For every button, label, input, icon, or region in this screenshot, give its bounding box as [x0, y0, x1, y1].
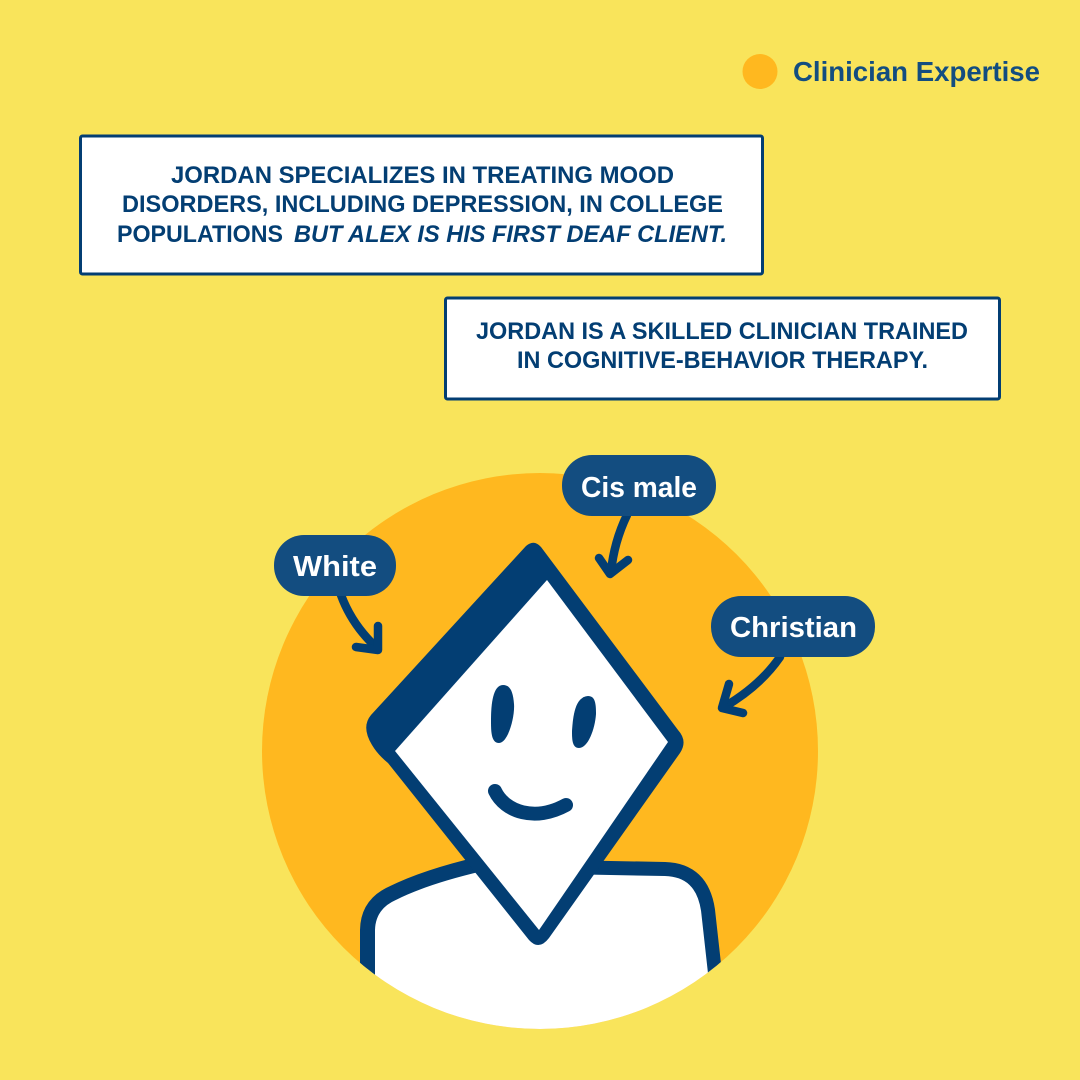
arrow: Cis male [599, 515, 628, 574]
legend: Clinician Expertise: Clinician Expertise [793, 56, 1040, 87]
text box: specialization [80, 136, 762, 274]
arrow: White [341, 595, 378, 650]
label: Cis male: Cis male [581, 472, 697, 504]
eyes [491, 685, 596, 748]
character body [368, 864, 718, 1040]
label: White: White [293, 551, 377, 583]
label: White [274, 535, 396, 596]
head: diamond with hair [366, 543, 684, 945]
character: Jordan [366, 543, 718, 1040]
text box: specialization: POPULATIONS [117, 221, 283, 248]
text box: training [446, 298, 1000, 399]
orange background circle [262, 473, 818, 1029]
label: Christian [711, 596, 875, 657]
label: Christian: Christian [730, 612, 857, 644]
text box: training: JORDAN IS A SKILLED CLINICIAN TRAINED [476, 318, 968, 345]
text box: specialization: BUT ALEX IS HIS FIRST DEAF CLIENT. [294, 221, 727, 248]
text box: training: IN COGNITIVE-BEHAVIOR THERAPY. [517, 347, 928, 374]
smile [495, 791, 566, 814]
text box: specialization: JORDAN SPECIALIZES IN TREATING MOOD [171, 162, 674, 189]
text box: specialization: DISORDERS, INCLUDING DEPRESSION, IN COLLEGE [122, 191, 723, 218]
label: Cis male [562, 455, 716, 516]
arrow: Christian [722, 657, 780, 713]
